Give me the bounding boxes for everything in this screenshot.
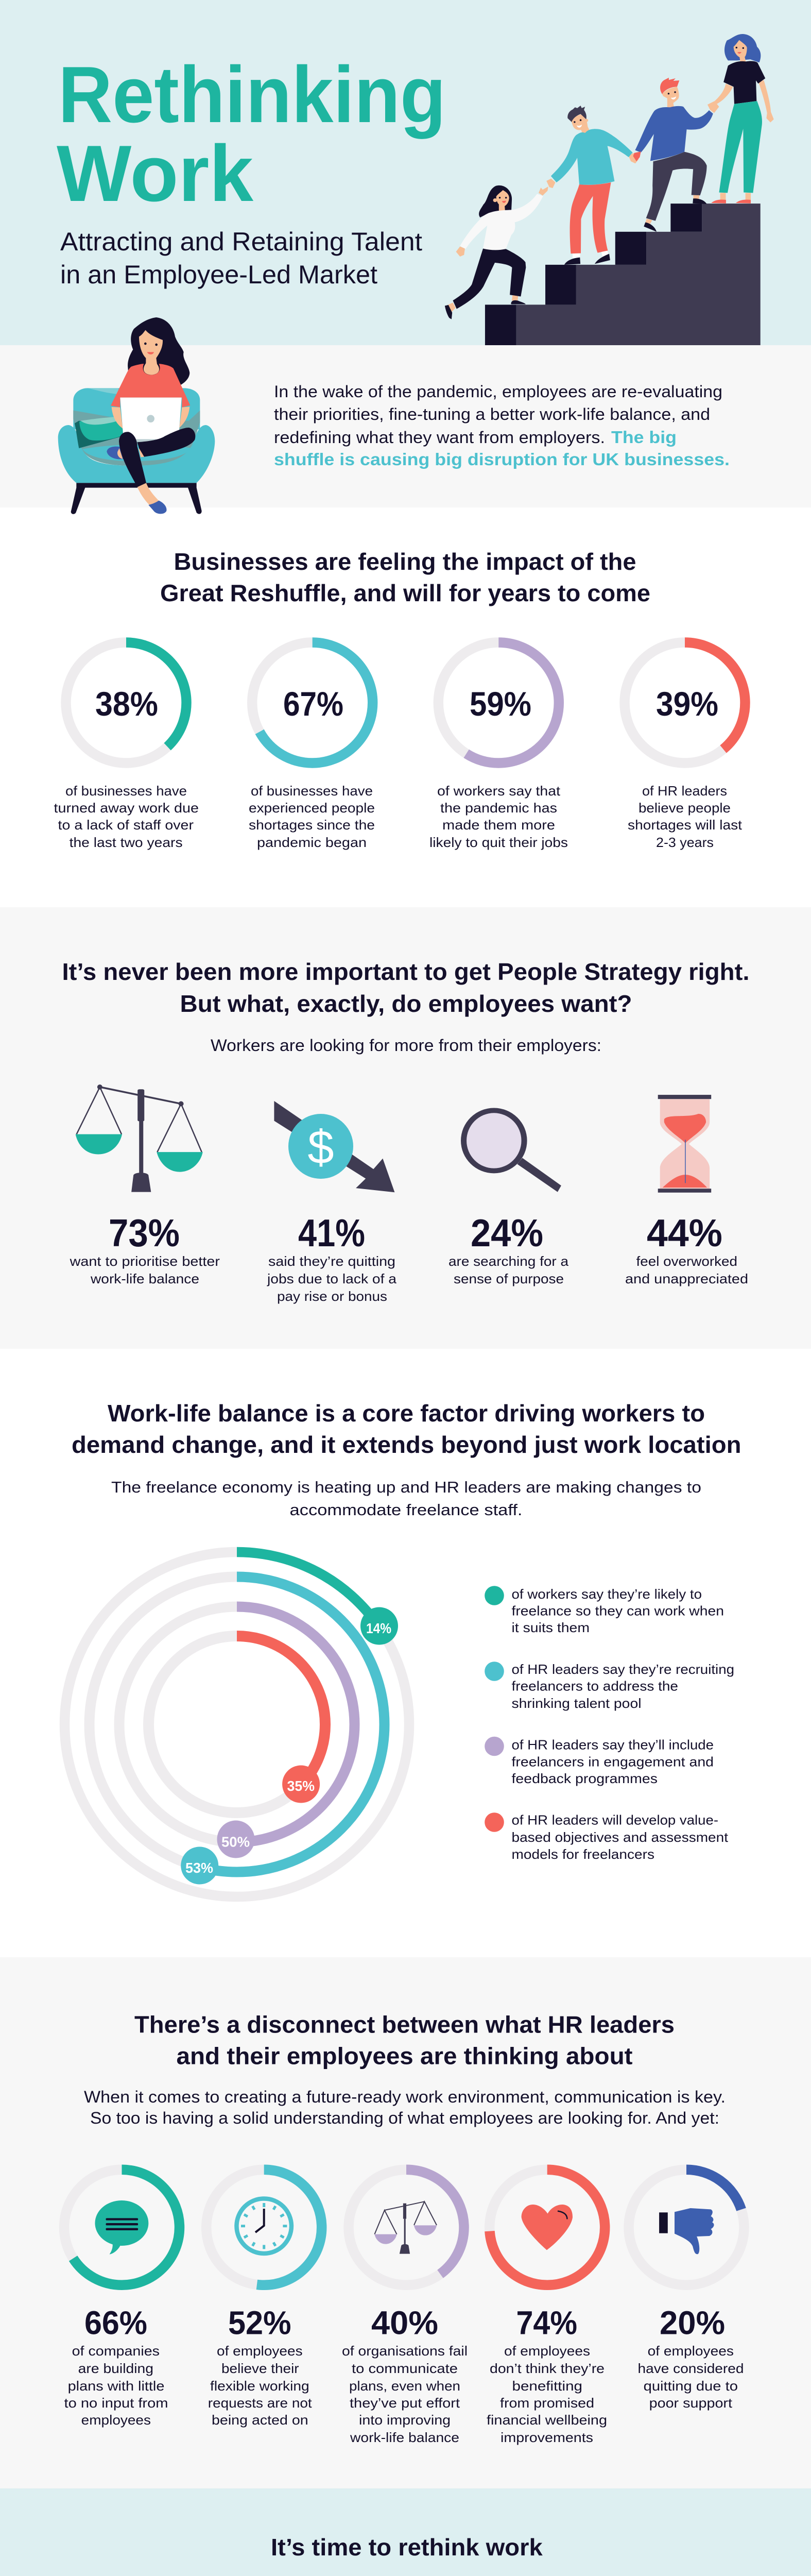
legend item: 50% HR leaders: of HR leaders say they’ll include xyxy=(512,1737,714,1753)
stat: 73% with scales icon: want to prioritise better xyxy=(69,1253,220,1269)
donut stat: 38%: the last two years xyxy=(70,835,183,850)
subheading: Workers are looking for more from their employers: xyxy=(211,1036,601,1055)
legend item: 35% HR leaders: of HR leaders will develop value- xyxy=(512,1812,718,1828)
title: Work xyxy=(57,129,254,218)
subheading: When it comes to creating a future-ready work environment, communication is key. xyxy=(84,2088,726,2106)
donut stat: 38% xyxy=(54,642,199,850)
legs xyxy=(137,428,195,457)
donut stat: 39%: 2-3 years xyxy=(656,835,714,850)
donut stat: 52% with clock icon: believe their xyxy=(221,2361,299,2376)
donut stat: 67%: experienced people xyxy=(249,800,375,816)
legend item: 53% HR leaders: shrinking talent pool xyxy=(512,1696,642,1711)
stat: 44% with hourglass icon: and unappreciated xyxy=(625,1271,748,1286)
icon: hourglass xyxy=(658,1095,711,1193)
donut stat: 74% with heart icon: 74% xyxy=(516,2304,577,2341)
person: man in blue sweater xyxy=(633,78,719,232)
panel: header xyxy=(0,0,811,346)
donut stat: 67%: shortages since the xyxy=(249,817,375,833)
chair legs xyxy=(71,483,202,514)
stat: 24% with magnifier icon: sense of purpose xyxy=(454,1271,564,1286)
bubble: 35% xyxy=(282,1765,320,1803)
donut stat: 67%: of businesses have xyxy=(251,783,373,799)
donut stat: 40% with scales icon: plans, even when xyxy=(349,2378,460,2394)
donut stat: 66% with chat icon: plans with little xyxy=(68,2378,164,2394)
heading xyxy=(62,958,750,1017)
panel: work-life balance and freelancers xyxy=(0,1349,811,1957)
subtitle: Attracting and Retaining Talent xyxy=(60,227,422,256)
stat: 24% with magnifier icon xyxy=(448,1108,569,1286)
icon: clock xyxy=(234,2196,294,2256)
donut stat: 20% with thumbs-down icon: of employees xyxy=(648,2343,734,2359)
donut stat: 67%: pandemic began xyxy=(257,835,367,850)
radial chart: freelance statistics xyxy=(65,1552,409,1897)
donut stat: 40% with scales icon: to communicate xyxy=(352,2361,458,2376)
legend item: 14% workers: of workers say they’re likely to xyxy=(512,1586,702,1602)
stat: 24% with magnifier icon: are searching for a xyxy=(448,1253,569,1269)
legend item: 53% HR leaders xyxy=(485,1662,734,1711)
donut stat: 20% with thumbs-down icon: 20% xyxy=(660,2304,725,2341)
heading: It’s never been more important to get People Strategy right. xyxy=(62,958,750,985)
subtitle xyxy=(60,227,422,289)
hair xyxy=(128,317,189,385)
icon: scales xyxy=(76,1084,203,1192)
donut stat: 38%: of businesses have xyxy=(65,783,187,799)
donut stat: 59%: likely to quit their jobs xyxy=(429,835,568,850)
bubble: 14% xyxy=(360,1607,398,1645)
heading: Businesses are feeling the impact of the xyxy=(174,548,636,575)
subheading: So too is having a solid understanding of what employees are looking for. And yet: xyxy=(90,2109,719,2127)
intro text: The big xyxy=(611,428,677,447)
heading: demand change, and it extends beyond just work location xyxy=(72,1431,741,1458)
stat: 41% with falling dollar icon: jobs due to lack of a xyxy=(267,1271,397,1286)
donut stat: 59%: the pandemic has xyxy=(440,800,557,816)
stat: 41% with falling dollar icon: said they’re quitting xyxy=(268,1253,395,1269)
icon: falling arrow and dollar coin xyxy=(274,1101,394,1192)
stairs xyxy=(485,204,761,346)
donut stat: 59%: made them more xyxy=(442,817,555,833)
intro text: their priorities, fine-tuning a better work-life balance, and xyxy=(274,405,710,423)
legend item: 35% HR leaders xyxy=(485,1812,729,1862)
stat: 41% with falling dollar icon xyxy=(267,1101,397,1304)
donut stat: 74% with heart icon: don’t think they’re xyxy=(490,2361,605,2376)
legend item: 50% HR leaders xyxy=(485,1737,714,1786)
heading: It’s time to rethink work xyxy=(271,2534,543,2561)
intro text: redefining what they want from employers. xyxy=(274,428,605,447)
bubble: 14%: 14% xyxy=(366,1620,391,1636)
donut stat: 40% with scales icon: work-life balance xyxy=(350,2430,459,2445)
chair seat and arms xyxy=(82,445,192,461)
icon: thumbs down xyxy=(659,2208,714,2254)
donut stat: 52% with clock icon: 52% xyxy=(228,2304,291,2341)
stat: 41% with falling dollar icon: pay rise or bonus xyxy=(277,1289,387,1304)
donut stat: 52% with clock icon: of employees xyxy=(217,2343,303,2359)
donut stat: 67%: 67% xyxy=(283,685,343,723)
stat: 73% with scales icon: 73% xyxy=(109,1211,180,1255)
donut stat: 66% with chat icon xyxy=(64,2170,179,2428)
intro text: shuffle is causing big disruption for UK businesses. xyxy=(274,450,730,469)
legend item: 50% HR leaders: freelancers in engagement and xyxy=(512,1754,714,1769)
donut stat: 52% with clock icon: requests are not xyxy=(208,2395,313,2411)
donut stat: 20% with thumbs-down icon: poor support xyxy=(649,2395,733,2411)
panel: time to rethink work xyxy=(0,2488,811,2576)
donut stat: 74% with heart icon xyxy=(487,2170,607,2445)
donut stat: 40% with scales icon: they’ve put effort xyxy=(350,2395,460,2411)
panel: impact of the great reshuffle xyxy=(0,507,811,907)
donut stat: 66% with chat icon: employees xyxy=(81,2412,151,2428)
heading: There’s a disconnect between what HR leaders xyxy=(134,2011,675,2038)
legend item: 14% workers: it suits them xyxy=(512,1620,590,1635)
title xyxy=(57,50,446,218)
donut stat: 38%: 38% xyxy=(95,685,158,723)
intro text: In the wake of the pandemic, employees are re-evaluating xyxy=(274,382,722,401)
icon: falling arrow and dollar coin: $ xyxy=(307,1121,334,1174)
donut stat: 40% with scales icon xyxy=(342,2170,468,2445)
donut stat: 38%: turned away work due xyxy=(54,800,199,816)
heading: Work-life balance is a core factor driving workers to xyxy=(108,1400,705,1427)
stat: 41% with falling dollar icon: 41% xyxy=(298,1211,365,1255)
donut stat: 66% with chat icon: 66% xyxy=(84,2304,147,2341)
legend item: 50% HR leaders: feedback programmes xyxy=(512,1771,658,1786)
title: Rethinking xyxy=(58,50,446,139)
icon: small scales xyxy=(374,2201,437,2254)
donut stat: 20% with thumbs-down icon: have considered xyxy=(637,2361,744,2376)
donut stat: 74% with heart icon: benefitting xyxy=(512,2378,582,2394)
subheading xyxy=(84,2088,726,2127)
donut stat: 74% with heart icon: financial wellbeing xyxy=(487,2412,607,2428)
face xyxy=(139,330,163,375)
illustration: woman with laptop in armchair xyxy=(58,317,215,514)
donut stat: 39% xyxy=(625,642,745,850)
legend item: 53% HR leaders: freelancers to address the xyxy=(512,1679,678,1694)
donut stat: 59% xyxy=(429,642,568,850)
heading xyxy=(72,1400,741,1458)
person: man in teal sweater xyxy=(546,106,639,265)
donut stat: 52% with clock icon: being acted on xyxy=(212,2412,308,2428)
illustration: people climbing stairs xyxy=(445,34,774,346)
icon: chat bubble xyxy=(95,2200,148,2255)
donut stat: 39%: believe people xyxy=(639,800,731,816)
donut stat: 39%: 39% xyxy=(656,685,718,723)
donut stat: 52% with clock icon xyxy=(206,2170,322,2428)
heading: But what, exactly, do employees want? xyxy=(180,990,632,1017)
person: woman in white sweater xyxy=(445,185,548,319)
icon: magnifying glass xyxy=(461,1108,561,1192)
stat: 44% with hourglass icon xyxy=(625,1095,748,1286)
donut stat: 66% with chat icon: are building xyxy=(78,2361,153,2376)
stat: 24% with magnifier icon: 24% xyxy=(471,1211,543,1255)
legend item: 14% workers: freelance so they can work when xyxy=(512,1603,724,1619)
donut stat: 59%: of workers say that xyxy=(437,783,561,799)
bubble: 53% xyxy=(181,1846,218,1885)
stat: 44% with hourglass icon: 44% xyxy=(647,1211,722,1255)
laptop xyxy=(120,398,182,442)
stat: 44% with hourglass icon: feel overworked xyxy=(636,1253,737,1269)
bubble: 50% xyxy=(217,1821,254,1858)
donut stat: 52% with clock icon: flexible working xyxy=(210,2378,309,2394)
top xyxy=(111,364,190,408)
legend item: 53% HR leaders: of HR leaders say they’re recruiting xyxy=(512,1662,734,1677)
legend item: 14% workers xyxy=(485,1586,724,1635)
donut stat: 40% with scales icon: 40% xyxy=(371,2304,438,2341)
stat: 73% with scales icon: work-life balance xyxy=(90,1271,199,1286)
donut stat: 38%: to a lack of staff over xyxy=(58,817,194,833)
donut stat: 66% with chat icon: to no input from xyxy=(64,2395,168,2411)
panel: what employees want xyxy=(0,907,811,1349)
icon: heart xyxy=(522,2205,573,2250)
donut stat: 59%: 59% xyxy=(470,685,531,723)
donut stat: 20% with thumbs-down icon xyxy=(629,2170,744,2411)
bubble: 50%: 50% xyxy=(221,1834,250,1850)
legend item: 35% HR leaders: based objectives and assessment xyxy=(512,1829,729,1845)
subtitle: in an Employee-Led Market xyxy=(60,260,377,289)
panel: intro xyxy=(0,317,811,514)
donut stat: 39%: of HR leaders xyxy=(642,783,727,799)
subheading: accommodate freelance staff. xyxy=(289,1501,522,1519)
stat: 73% with scales icon xyxy=(69,1084,220,1286)
bubble: 53%: 53% xyxy=(185,1860,213,1876)
donut stat: 39%: shortages will last xyxy=(628,817,743,833)
intro text xyxy=(274,382,730,469)
arms xyxy=(112,406,189,429)
bubble: 35%: 35% xyxy=(287,1778,315,1794)
donut stat: 74% with heart icon: of employees xyxy=(504,2343,590,2359)
donut stat: 66% with chat icon: of companies xyxy=(72,2343,160,2359)
donut stat: 74% with heart icon: improvements xyxy=(501,2430,593,2445)
pillow xyxy=(75,417,123,448)
person: woman with blue hair xyxy=(711,34,774,204)
donut stat: 40% with scales icon: of organisations fail xyxy=(342,2343,468,2359)
donut stat: 40% with scales icon: into improving xyxy=(359,2412,451,2428)
legend item: 35% HR leaders: models for freelancers xyxy=(512,1846,654,1862)
heading: and their employees are thinking about xyxy=(176,2043,632,2070)
donut stat: 74% with heart icon: from promised xyxy=(500,2395,594,2411)
subheading xyxy=(111,1478,701,1519)
heading xyxy=(160,548,650,606)
donut stat: 20% with thumbs-down icon: quitting due to xyxy=(644,2378,738,2394)
chair back xyxy=(73,388,200,429)
donut stat: 67% xyxy=(249,642,375,850)
subheading: The freelance economy is heating up and HR leaders are making changes to xyxy=(111,1478,701,1496)
foot on seat xyxy=(107,447,124,459)
panel: disconnect between HR leaders and employees xyxy=(0,1957,811,2488)
heading: Great Reshuffle, and will for years to come xyxy=(160,580,650,606)
heading xyxy=(134,2011,675,2070)
